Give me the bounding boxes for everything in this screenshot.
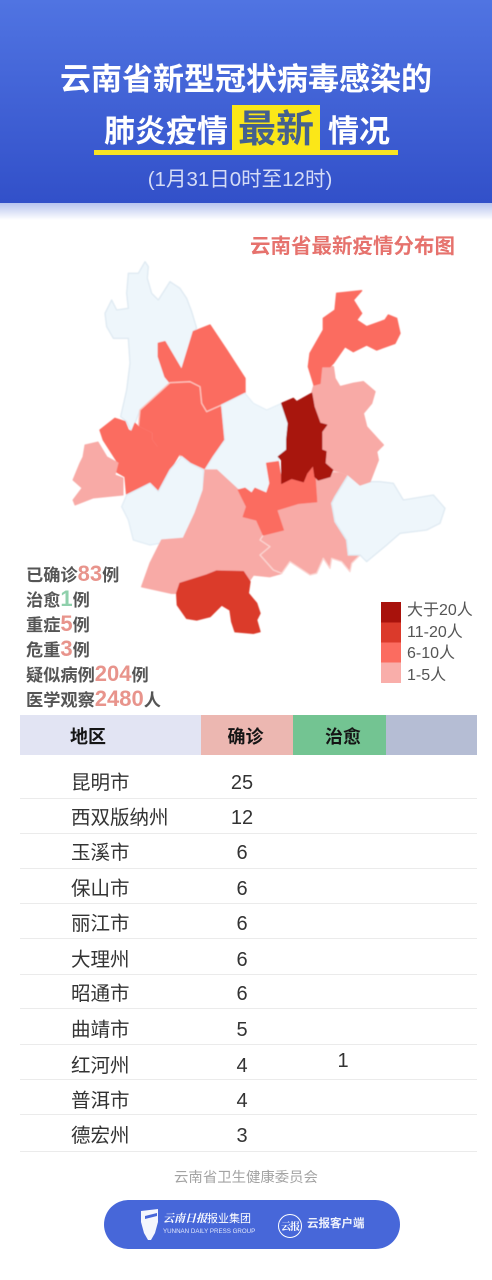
- title underline: [94, 150, 398, 155]
- region: Puer: [142, 470, 282, 593]
- row: Baoshan: 6: [236, 878, 248, 900]
- region: Kunming: [278, 393, 333, 483]
- row: Puer: 4: [236, 1090, 248, 1112]
- row: Dali: [71, 949, 248, 971]
- header cell: region: 地区: [70, 727, 106, 747]
- row: Dehong: 3: [236, 1125, 248, 1147]
- legend swatches: [381, 602, 401, 683]
- header cell: blank: [386, 715, 477, 755]
- legend label: 11-20: 11-20人: [407, 624, 463, 641]
- row: Qujing: 5: [236, 1019, 248, 1041]
- region: Baoshan: [100, 418, 182, 495]
- row: Xishuangbanna: 西双版纳州: [71, 807, 169, 829]
- icon: press group tower: [141, 1209, 158, 1240]
- table body: [20, 772, 477, 1152]
- region: Zhaotong: [308, 291, 400, 385]
- row: Kunming: [71, 772, 253, 794]
- row: Baoshan: 保山市: [71, 878, 130, 900]
- row: Yuxi: 玉溪市: [71, 842, 130, 864]
- row: Xishuangbanna: 12: [231, 807, 253, 829]
- region: Lijiang: [158, 325, 245, 412]
- header banner: [0, 0, 492, 218]
- summary statistics: [26, 561, 161, 711]
- legend label: 1-5: 1-5人: [407, 667, 446, 684]
- title line two left: 肺炎疫情: [104, 114, 228, 149]
- region: Chuxiong: [205, 393, 288, 493]
- row: Qujing: [71, 1019, 248, 1041]
- row: Honghe: [71, 1050, 349, 1077]
- row: Zhaotong: [71, 983, 248, 1005]
- row: Puer: [71, 1090, 248, 1112]
- row: Kunming: 25: [231, 772, 253, 794]
- source credit: 云南省卫生健康委员会: [174, 1170, 318, 1186]
- region: Yuxi: [238, 462, 317, 535]
- row: Dehong: [71, 1125, 248, 1147]
- press group name: 报业集团: [207, 1213, 251, 1225]
- row: Kunming: 昆明市: [71, 772, 130, 794]
- row: Honghe: 红河州: [71, 1055, 130, 1077]
- row: Lijiang: [71, 913, 248, 935]
- row: Honghe: 4: [236, 1055, 248, 1077]
- row: Honghe: 1: [337, 1050, 349, 1072]
- row: Dehong: 德宏州: [71, 1125, 130, 1147]
- banner fade: [0, 203, 492, 220]
- row: Lijiang: 丽江市: [71, 913, 130, 935]
- region: Xishuangbanna: [177, 571, 260, 633]
- stat: critical: 危重3例: [26, 636, 90, 661]
- table header: [20, 715, 477, 755]
- region: Honghe: [260, 472, 360, 575]
- stat: suspected: 疑似病例204例: [26, 661, 149, 686]
- legend label: over 20: 大于20人: [407, 602, 473, 619]
- row: Qujing: 曲靖市: [71, 1019, 130, 1041]
- row: Lijiang: 6: [236, 913, 248, 935]
- stat: confirmed: 已确诊83例: [26, 561, 119, 586]
- highlight box: 最新: 最新: [238, 109, 314, 151]
- title line two right: 情况: [328, 114, 390, 149]
- region: Dali: [138, 382, 225, 470]
- map heading: 云南省最新疫情分布图: [250, 235, 455, 258]
- header cell: confirmed: [201, 715, 293, 755]
- row: Yuxi: [71, 842, 248, 864]
- row: Baoshan: [71, 878, 248, 900]
- region: Wenshan: [332, 475, 445, 562]
- row: Zhaotong: 6: [236, 983, 248, 1005]
- region: Dehong: [73, 442, 123, 505]
- row: Puer: 普洱市: [71, 1090, 130, 1112]
- press group English name: YUNNAN DAILY PRESS GROUP: [163, 1228, 255, 1235]
- region: Lincang: [122, 457, 203, 545]
- header cell: region: [20, 715, 201, 755]
- icon: Yunbao round logo: 云报: [281, 1218, 299, 1233]
- title line one: 云南省新型冠状病毒感染的: [60, 62, 432, 97]
- icon: Yunbao round logo: [278, 1214, 302, 1238]
- header cell: cured: [293, 715, 386, 755]
- footer logo pill: [104, 1200, 400, 1249]
- newspaper name: 云南日报: [163, 1213, 207, 1225]
- region: Diqing and Nujiang: [105, 262, 197, 432]
- row: Xishuangbanna: [71, 807, 253, 829]
- map legend: [381, 602, 473, 684]
- row: Dali: 大理州: [71, 949, 130, 971]
- row: Zhaotong: 昭通市: [71, 983, 130, 1005]
- legend label: 6-10: 6-10人: [407, 645, 455, 662]
- stat: under observation: 医学观察2480人: [26, 686, 161, 711]
- region: Qujing: [312, 367, 383, 485]
- stat: cured: 治愈1例: [26, 586, 90, 611]
- row: Yuxi: 6: [236, 842, 248, 864]
- Yunbao client name: 云报客户端: [307, 1218, 364, 1230]
- map of Yunnan: [72, 261, 446, 635]
- subtitle: time range: (1月31日0时至12时): [148, 168, 332, 191]
- row: Dali: 6: [236, 949, 248, 971]
- header cell: cured: 治愈: [325, 727, 361, 747]
- header cell: confirmed: 确诊: [228, 727, 264, 747]
- stat: severe: 重症5例: [26, 611, 90, 636]
- banner background: [0, 0, 492, 203]
